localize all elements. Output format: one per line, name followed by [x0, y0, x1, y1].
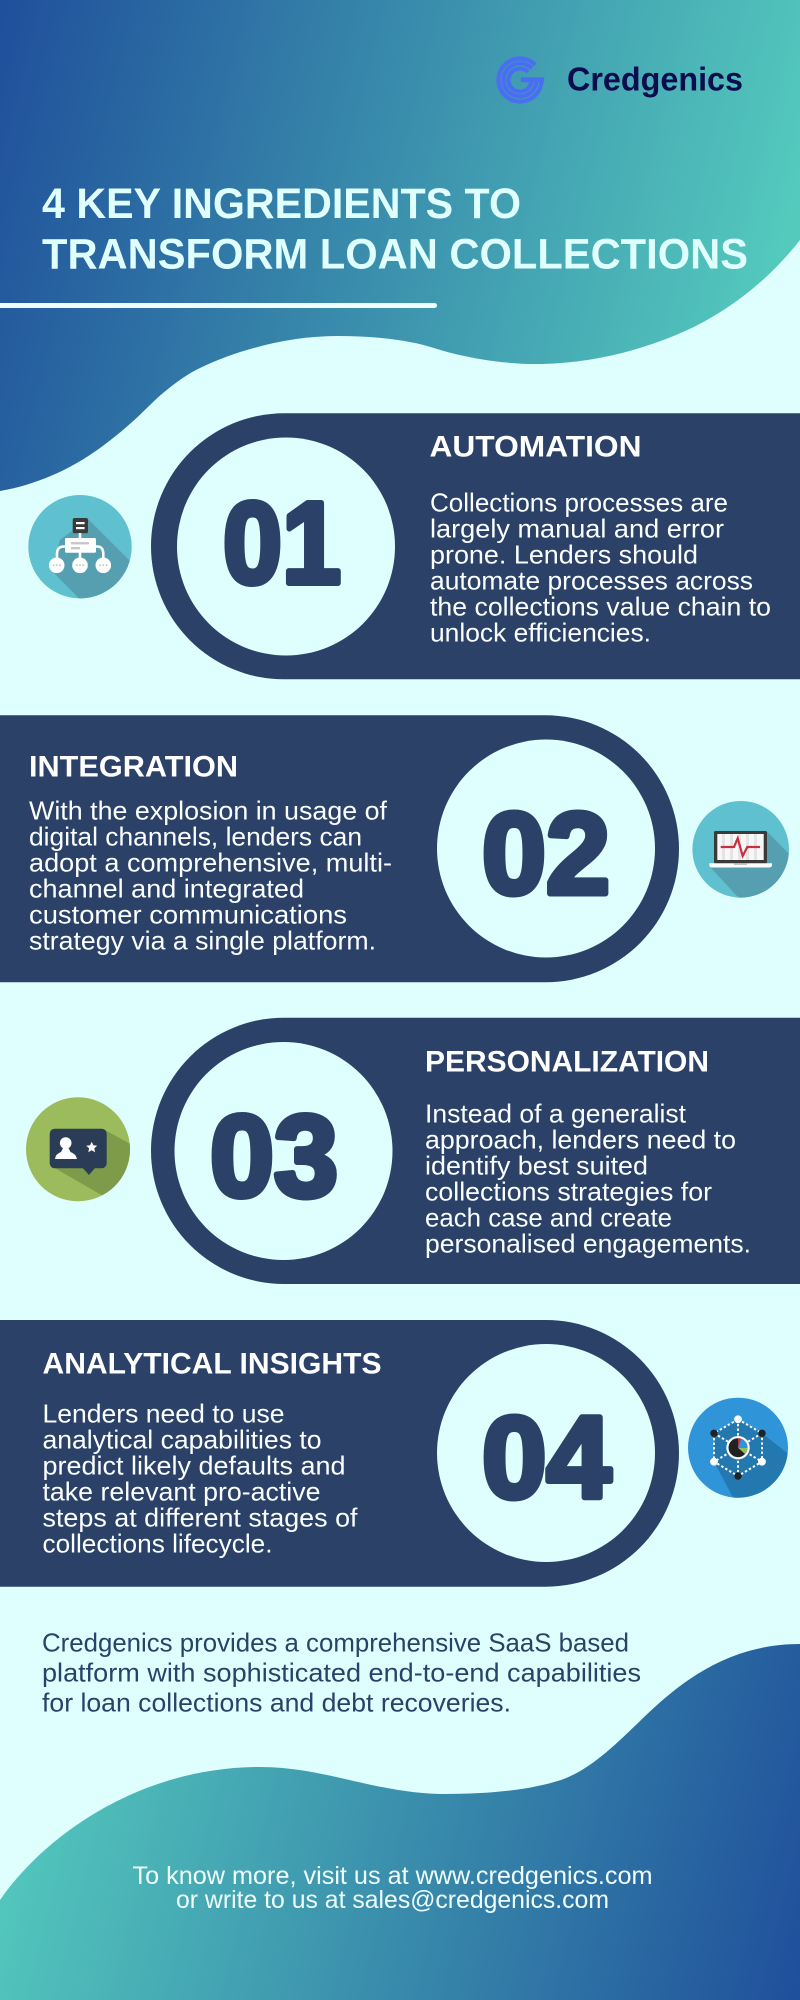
body text: each case and create	[425, 1203, 672, 1233]
body text: Lenders need to use	[42, 1399, 284, 1429]
body text: collections lifecycle.	[42, 1529, 272, 1559]
body text	[425, 1099, 751, 1259]
logo mark	[498, 59, 543, 102]
number circle	[174, 1042, 392, 1260]
body text: personalised engagements.	[425, 1229, 751, 1259]
number circle	[437, 740, 655, 958]
panel background	[0, 1320, 679, 1587]
heading: AUTOMATION	[430, 431, 642, 464]
summary text: platform with sophisticated end-to-end capabilities	[42, 1658, 641, 1688]
header wave background	[0, 0, 800, 491]
number 03: 03	[210, 1091, 338, 1221]
body text	[42, 1399, 358, 1559]
title: TRANSFORM LOAN COLLECTIONS	[42, 230, 748, 278]
body text	[430, 488, 771, 648]
number 02: 02	[482, 788, 610, 918]
contact text: To know more, visit us at www.credgenics.com	[132, 1862, 652, 1890]
body text: steps at different stages of	[42, 1503, 358, 1533]
heading: PERSONALIZATION	[425, 1046, 709, 1079]
footer wave background	[0, 1644, 800, 2000]
title	[42, 180, 748, 278]
title underline	[0, 303, 437, 308]
contact text	[132, 1862, 652, 1914]
icon: data hexagon with pie chart	[688, 1398, 788, 1498]
panel background	[151, 1018, 800, 1284]
icon: laptop with pulse	[692, 801, 789, 898]
heading: ANALYTICAL INSIGHTS	[42, 1347, 382, 1380]
title: 4 KEY INGREDIENTS TO	[42, 180, 521, 228]
body text: Collections processes are	[430, 488, 728, 518]
heading: INTEGRATION	[29, 751, 238, 784]
body text: collections strategies for	[425, 1177, 712, 1207]
number 01: 01	[223, 478, 341, 608]
panel 4: analytical insights	[0, 1320, 679, 1587]
body text: With the explosion in usage of	[29, 795, 388, 825]
body text: Instead of a generalist	[425, 1099, 687, 1129]
panel background	[151, 413, 800, 679]
panel background	[0, 715, 679, 982]
body text: largely manual and error	[430, 514, 724, 544]
body text: customer communications	[29, 899, 347, 929]
body text: adopt a comprehensive, multi-	[29, 847, 392, 877]
panel 3: personalization	[151, 1018, 800, 1284]
body text: identify best suited	[425, 1151, 648, 1181]
body text: automate processes across	[430, 566, 753, 596]
panel 2: integration	[0, 715, 679, 982]
body text: predict likely defaults and	[42, 1451, 346, 1481]
panel 1: automation	[151, 413, 800, 679]
body text: digital channels, lenders can	[29, 821, 362, 851]
body text: prone. Lenders should	[430, 540, 698, 570]
logo wordmark: Credgenics	[567, 61, 743, 98]
contact text: or write to us at sales@credgenics.com	[176, 1886, 609, 1914]
summary text: Credgenics provides a comprehensive SaaS based	[42, 1628, 629, 1658]
body text: approach, lenders need to	[425, 1125, 736, 1155]
number circle	[177, 438, 395, 656]
body text	[29, 795, 392, 955]
summary text	[42, 1628, 641, 1718]
summary text: for loan collections and debt recoveries.	[42, 1688, 511, 1718]
body text: channel and integrated	[29, 873, 304, 903]
body text: the collections value chain to	[430, 592, 771, 622]
body text: strategy via a single platform.	[29, 925, 376, 955]
body text: unlock efficiencies.	[430, 618, 651, 648]
number circle	[437, 1344, 655, 1562]
body text: analytical capabilities to	[42, 1425, 322, 1455]
icon: workflow	[28, 495, 132, 598]
body text: take relevant pro-active	[42, 1477, 320, 1507]
number 04: 04	[482, 1392, 611, 1522]
logo: Credgenics	[498, 59, 743, 102]
icon: speech bubble with profile and star	[26, 1097, 130, 1202]
